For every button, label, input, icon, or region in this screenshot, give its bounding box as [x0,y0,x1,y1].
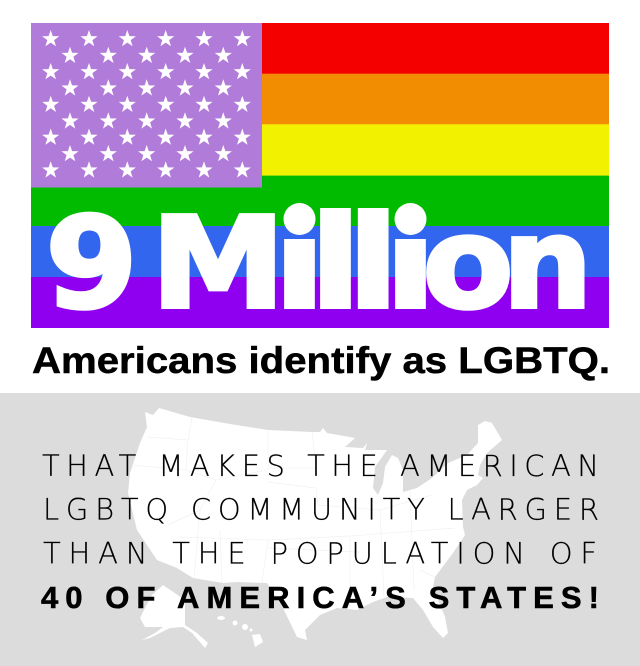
body text [42,449,599,570]
subheading: Americans identify as LGBTQ. [32,340,610,381]
headline: 9 Million: l [348,185,399,339]
body text: THAN THE POPULATION OF [43,536,597,570]
panel: rainbow flag [31,23,609,328]
body text: THAT MAKES THE AMERICAN [42,449,599,483]
panel: grey background [0,393,640,666]
body text: LGBTQ COMMUNITY LARGER [43,492,599,526]
headline: 9 Million: i [274,191,325,337]
headline: 9 Million: i [385,191,436,337]
headline: 9 Million: l [310,185,361,339]
headline: 9 Million: o [423,191,513,337]
flag canton with stars [31,23,262,188]
body text: bold line: 40 OF AMERICA’S STATES! [41,580,599,615]
headline: 9 Million: M [151,190,285,337]
headline: 9 Million: n [503,190,592,337]
Hawaii [217,616,263,647]
headline: 9 Million: 9 [46,191,138,337]
state lines [132,418,455,606]
headline: 9 Million [50,203,584,311]
Alaska [140,585,208,648]
map of the United States [128,408,502,648]
